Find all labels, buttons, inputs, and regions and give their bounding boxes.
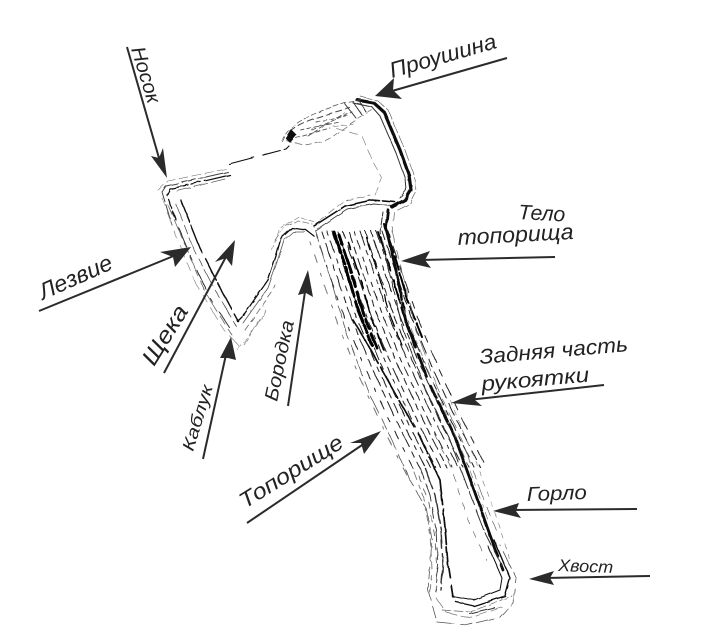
arrow: Каблук [203,337,236,459]
label: Хвост: Хвост [557,556,613,577]
label: Тело топорища: топорища [457,219,574,250]
arrow: Тело топорища [401,251,555,268]
label: Проушина: Проушина [386,28,499,83]
dark streaks [334,224,422,355]
axe head outline [158,146,315,350]
label: Горло: Горло [526,482,587,506]
central line [353,320,453,597]
label: Тело топорища: Тело [518,201,566,226]
illustration: axe [158,96,516,625]
arrow: Носок [127,47,167,178]
label: Лезвие: Лезвие [33,249,116,305]
label: Задняя часть рукоятки [478,333,629,396]
label: Щека: Щека [136,300,193,370]
label: Задняя часть рукоятки: рукоятки [479,364,590,396]
label: Каблук: Каблук [179,381,217,453]
arrow: Горло [493,503,637,518]
arrow: Лезвие [39,247,191,311]
handle [310,210,516,625]
arrow: Щека [164,240,235,373]
upper hatching [310,231,486,478]
arrow: Топорище [247,431,381,523]
label: Носок: Носок [126,44,165,107]
axe head upper back and eye [282,96,416,230]
label: Задняя часть рукоятки: Задняя часть [478,333,629,369]
outer left edge [315,230,516,625]
arrow: Бородка [288,270,313,406]
label: Бородка: Бородка [261,318,299,403]
label: Топорище: Топорище [234,430,348,513]
arrow: Задняя часть рукоятки [451,385,604,406]
arrow: Хвост [529,571,650,585]
lower handle hatching [414,468,443,598]
label: Тело топорища [457,201,574,250]
arrow: Проушина [375,58,507,99]
tail loops [456,540,510,606]
